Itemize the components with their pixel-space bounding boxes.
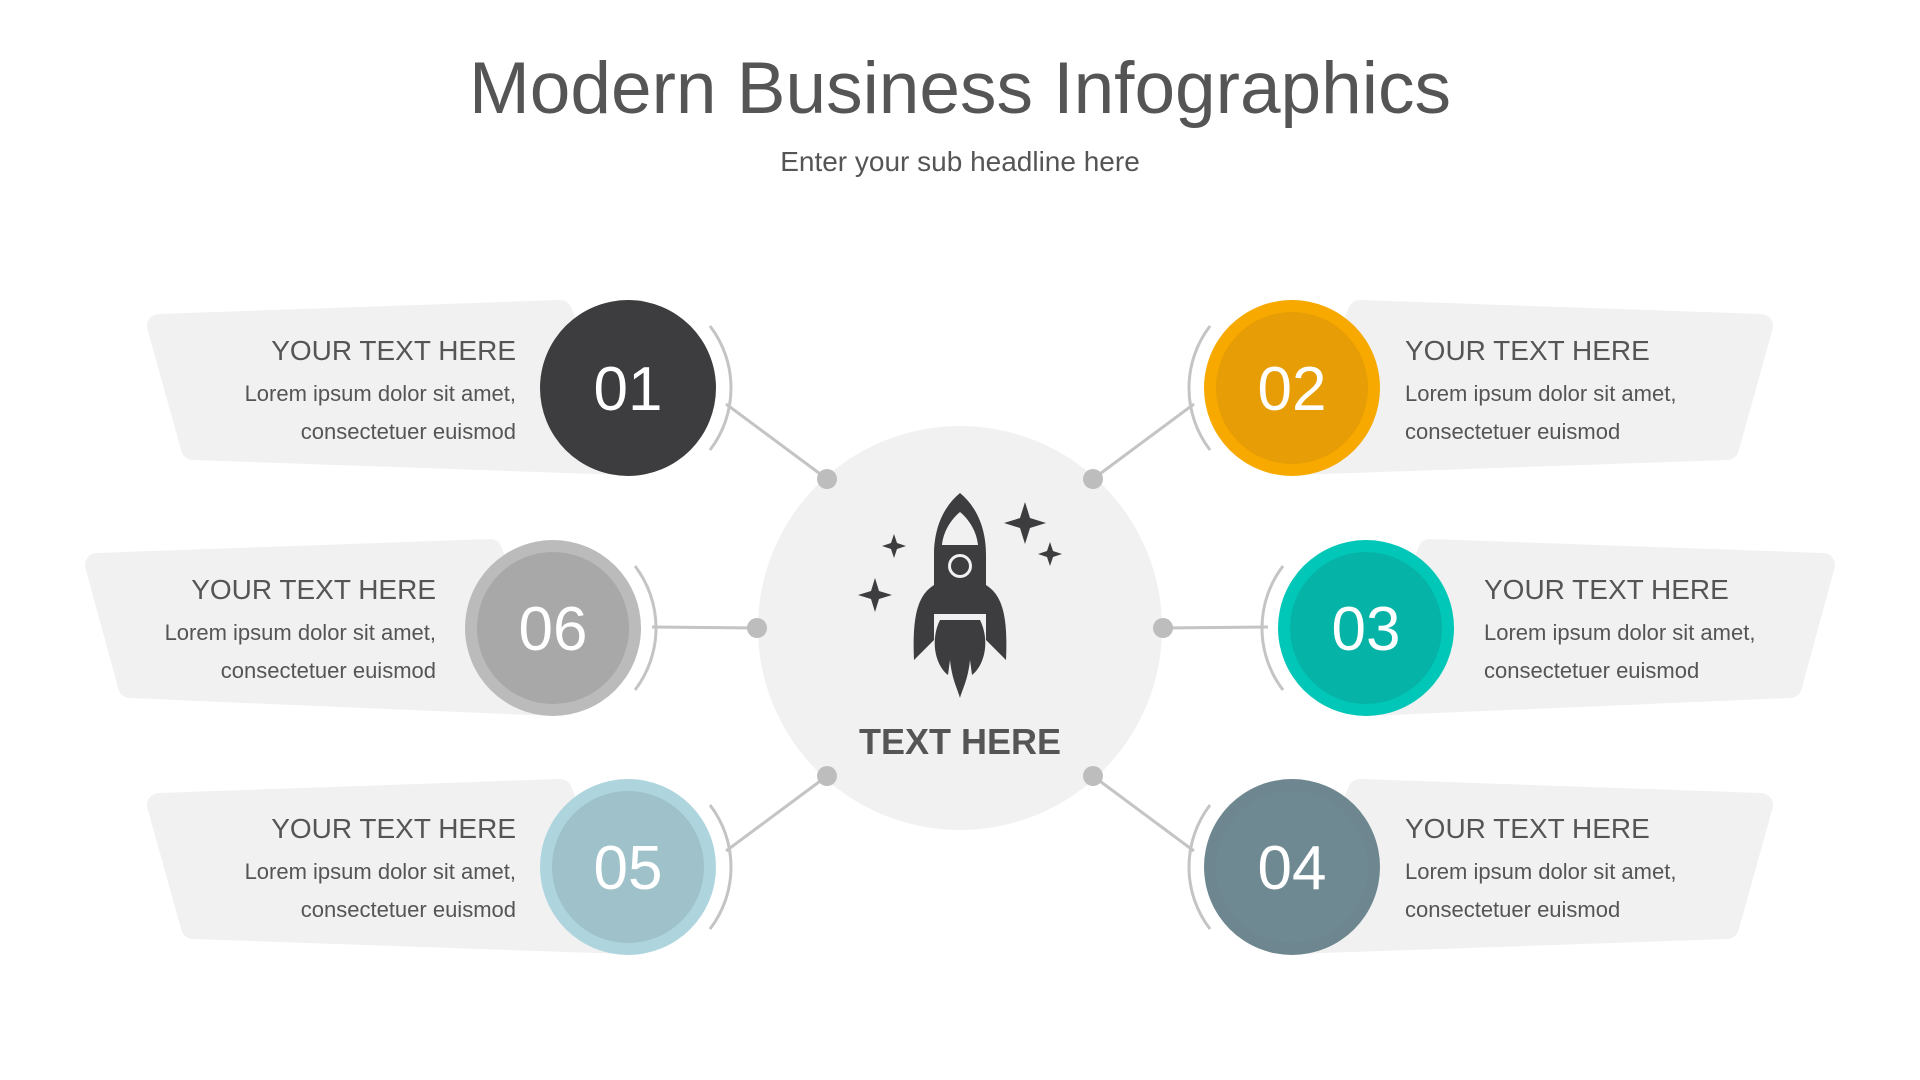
- panel: 03 background: [1367, 551, 1823, 704]
- connectors: [652, 404, 1268, 851]
- text block 02: [1405, 335, 1676, 444]
- circle 04: 04: [1258, 834, 1326, 903]
- text block 02: YOUR TEXT HERE: [1405, 335, 1650, 366]
- circle 05: [540, 779, 716, 955]
- text block 03: Lorem ipsum dolor sit amet,: [1484, 620, 1755, 645]
- text block 03: YOUR TEXT HERE: [1484, 574, 1729, 605]
- circle 02: [1204, 300, 1380, 476]
- panel: 04 background: [1295, 791, 1761, 942]
- center circle: [758, 426, 1162, 830]
- text block 06: YOUR TEXT HERE: [191, 574, 436, 605]
- text block 01: Lorem ipsum dolor sit amet,: [245, 381, 516, 406]
- subtitle: Enter your sub headline here: [780, 146, 1140, 177]
- text block 04: Lorem ipsum dolor sit amet,: [1405, 859, 1676, 884]
- icon: rocket: [858, 493, 1062, 698]
- text block 01: YOUR TEXT HERE: [271, 335, 516, 366]
- text block 02: consectetuer euismod: [1405, 419, 1620, 444]
- circle 03: 03: [1332, 595, 1400, 664]
- text block 05: YOUR TEXT HERE: [271, 813, 516, 844]
- text block 06: Lorem ipsum dolor sit amet,: [165, 620, 436, 645]
- circle 06: [465, 540, 641, 716]
- text block 06: [165, 574, 436, 683]
- text block 01: [245, 335, 516, 444]
- text block 05: consectetuer euismod: [301, 897, 516, 922]
- arcs: [635, 326, 1283, 929]
- text block 03: [1484, 574, 1755, 683]
- circle 04: [1204, 779, 1380, 955]
- text block 05: [245, 813, 516, 922]
- circle 05: 05: [594, 834, 662, 903]
- panel: 02 background: [1295, 312, 1761, 463]
- text block 04: consectetuer euismod: [1405, 897, 1620, 922]
- panel: 06 background: [97, 551, 553, 704]
- circle 01: 01: [594, 355, 662, 424]
- text block 02: Lorem ipsum dolor sit amet,: [1405, 381, 1676, 406]
- circle 06: 06: [519, 595, 587, 664]
- text block 04: [1405, 813, 1676, 922]
- title: Modern Business Infographics: [469, 48, 1451, 129]
- circle 01: [540, 300, 716, 476]
- text block 05: Lorem ipsum dolor sit amet,: [245, 859, 516, 884]
- text block 04: YOUR TEXT HERE: [1405, 813, 1650, 844]
- text block 01: consectetuer euismod: [301, 419, 516, 444]
- panel: 05 background: [159, 791, 625, 942]
- circle 03: [1278, 540, 1454, 716]
- circle 02: 02: [1258, 355, 1326, 424]
- panel: 01 background: [159, 312, 625, 463]
- text block 03: consectetuer euismod: [1484, 658, 1699, 683]
- center label: TEXT HERE: [859, 721, 1061, 762]
- text block 06: consectetuer euismod: [221, 658, 436, 683]
- dots: [747, 469, 1173, 786]
